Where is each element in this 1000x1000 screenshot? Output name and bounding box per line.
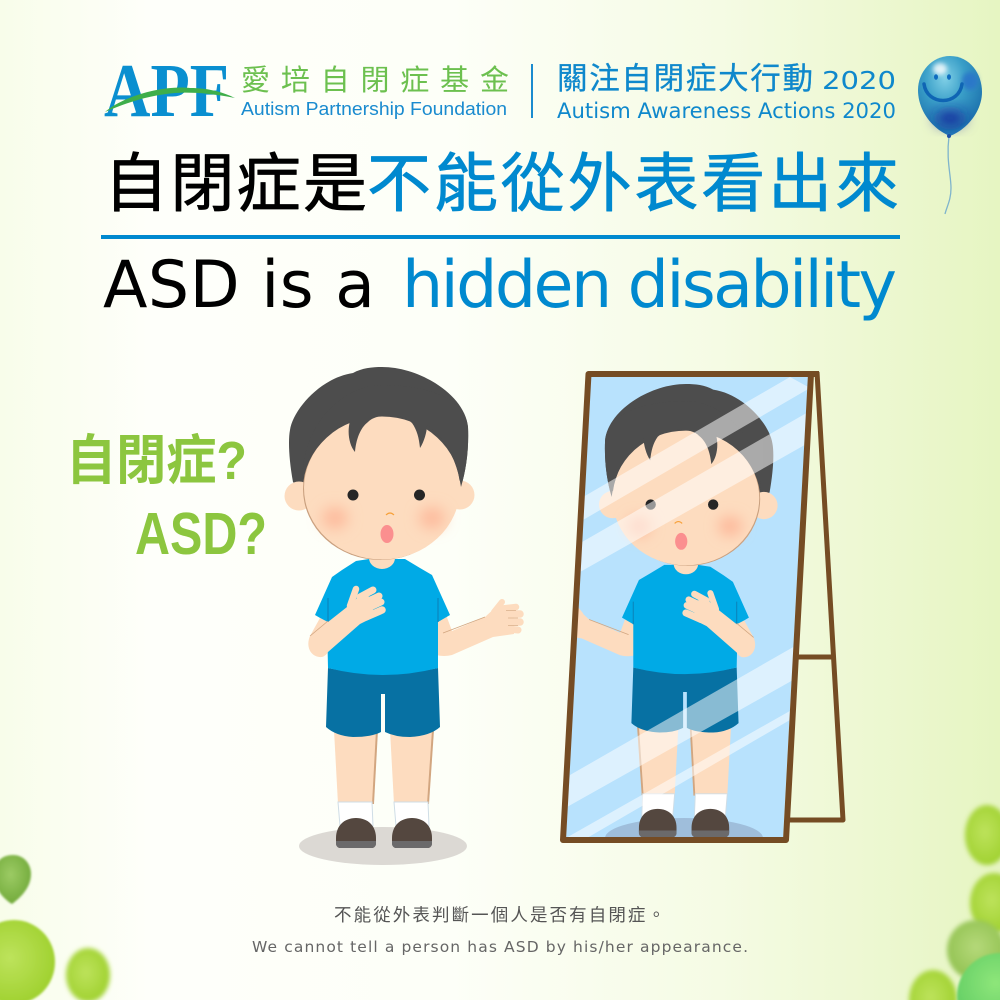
sleeve seams	[328, 598, 438, 622]
shoes	[336, 818, 432, 848]
mirror glass	[566, 377, 808, 838]
glass glare	[566, 377, 810, 838]
campaign year: 2020	[822, 66, 896, 95]
neck	[369, 547, 395, 569]
question English: ASD?	[135, 501, 267, 567]
header divider	[531, 64, 533, 118]
mirror frame	[563, 374, 819, 840]
chest arm and hand	[308, 589, 382, 657]
question Chinese: 自閉症?	[66, 431, 247, 491]
campaign Chinese: 關注自閉症大行動	[557, 62, 813, 96]
hair fringe	[303, 385, 468, 487]
shorts	[326, 668, 440, 737]
eyes	[348, 490, 358, 500]
logo Chinese name: 愛培自閉症基金	[241, 64, 509, 97]
green balloons bottom left	[0, 855, 110, 1000]
title Chinese: 自閉症是	[104, 148, 367, 220]
caption Chinese: 不能從外表判斷一個人是否有自閉症。	[334, 905, 665, 925]
mirror reflection	[577, 384, 778, 837]
campaign English: Autism Awareness Actions 2020	[557, 99, 896, 123]
hair back	[289, 367, 468, 500]
ears	[284, 480, 474, 510]
title Chinese	[104, 148, 899, 220]
t-shirt	[315, 559, 450, 675]
campaign name	[557, 62, 896, 123]
title Chinese: 不能從外表看出來	[367, 148, 899, 220]
title English: hidden disability	[402, 248, 897, 323]
logo mark: APF	[104, 49, 229, 133]
boy character	[284, 367, 520, 848]
socks	[338, 802, 429, 826]
logo English name: Autism Partnership Foundation	[241, 98, 507, 119]
ground shadow	[299, 827, 467, 865]
green balloons bottom right	[909, 805, 1000, 1000]
caption English: We cannot tell a person has ASD by his/her appearance.	[252, 938, 748, 956]
mouth	[380, 525, 394, 543]
mirror stand	[786, 372, 843, 820]
title English: ASD is a	[103, 248, 375, 323]
icon: blue smiley balloon	[918, 56, 982, 214]
title rule	[101, 235, 900, 239]
legs	[334, 730, 434, 804]
caption	[252, 905, 748, 956]
logo: APF foundation	[104, 49, 509, 133]
question text	[66, 431, 267, 567]
extended arm and hand	[436, 602, 520, 656]
title English	[103, 248, 897, 323]
cheeks	[322, 507, 445, 529]
nose	[386, 513, 394, 515]
mirror	[556, 372, 843, 858]
face	[303, 385, 468, 560]
